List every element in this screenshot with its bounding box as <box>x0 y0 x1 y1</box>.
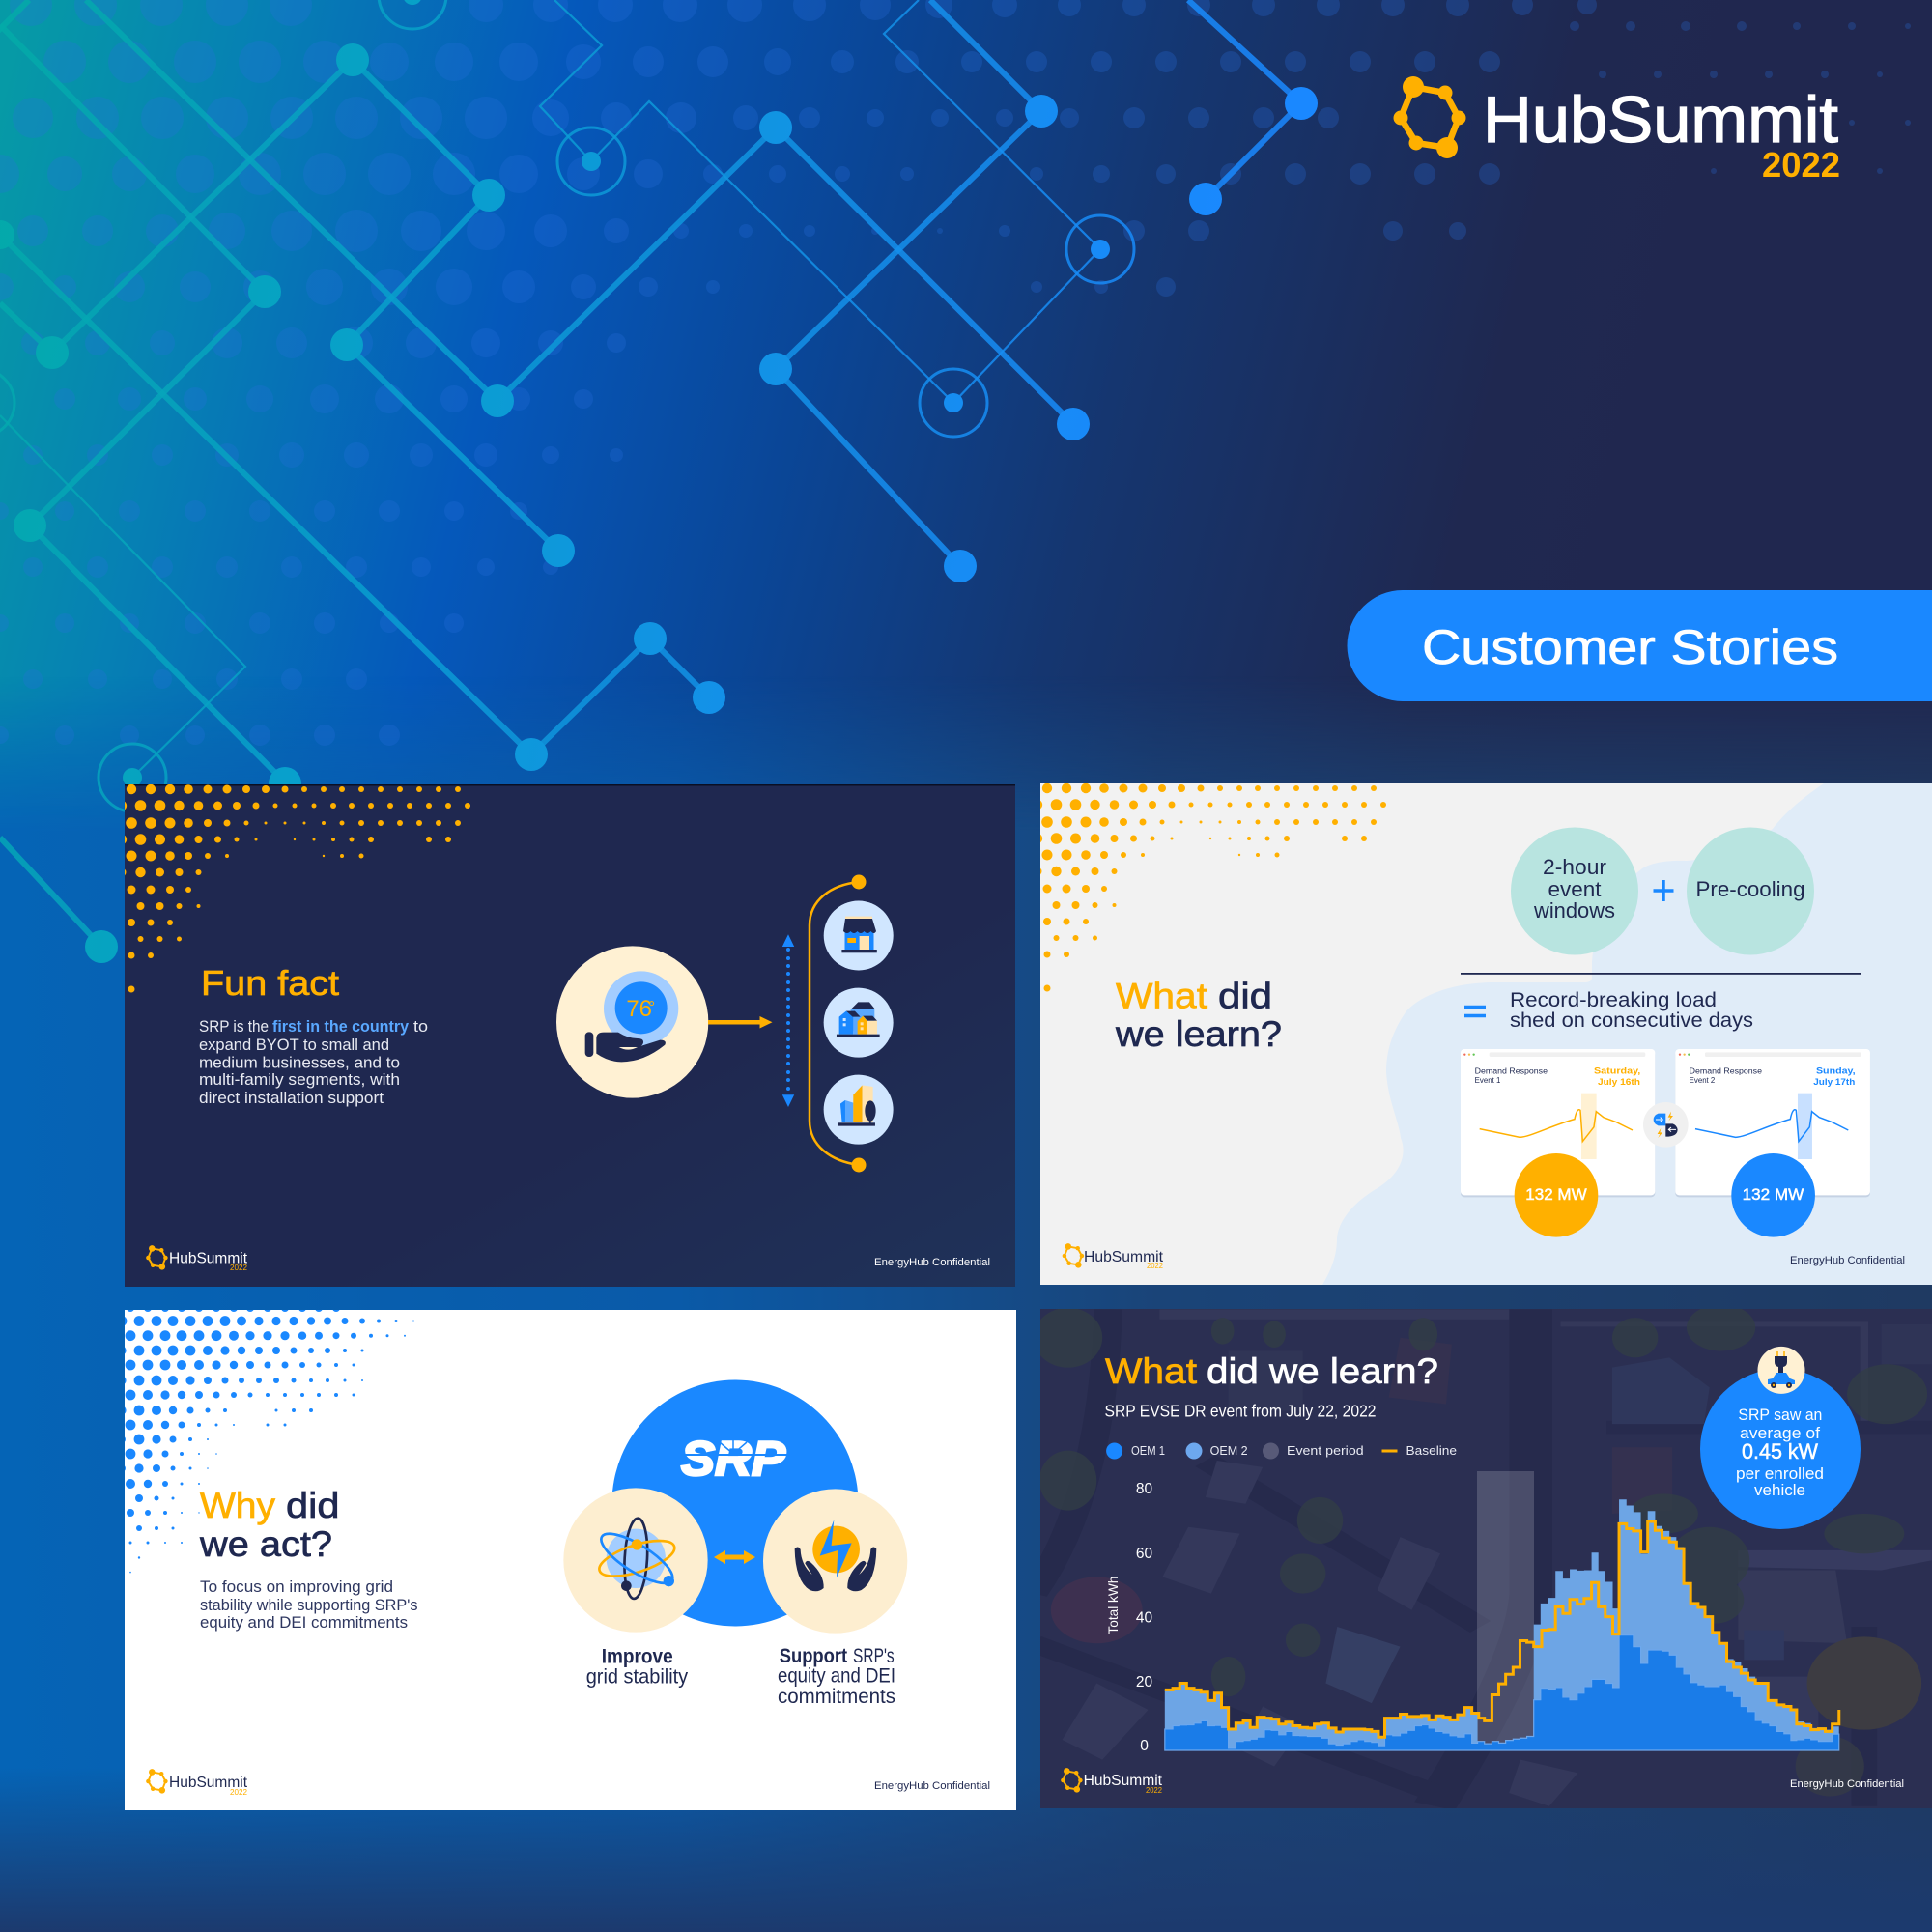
body text: To focus on improving grid <box>200 1578 393 1596</box>
card: Sunday event: July 17th <box>1813 1077 1855 1087</box>
chart subtitle: SRP EVSE DR event from July 22, 2022 <box>1105 1402 1376 1421</box>
result text: shed on consecutive days <box>1510 1009 1753 1032</box>
body text: direct installation support <box>199 1090 384 1107</box>
double arrow <box>714 1550 755 1564</box>
HubSummit 2022 logo <box>1393 76 1840 185</box>
footer logo: HubSummit <box>1084 1249 1164 1265</box>
card: Sunday event: Event 2 <box>1690 1076 1716 1085</box>
heading: Why did we act <box>199 1486 340 1564</box>
card: Sunday event: Demand Response <box>1690 1067 1763 1076</box>
callout: 0.45 kW per vehicle: vehicle <box>1754 1482 1805 1499</box>
icon: small business <box>824 900 894 970</box>
legend: OEM 2 <box>1210 1443 1248 1458</box>
card: Sunday event: 132 MW <box>1743 1185 1804 1204</box>
footer logo: 2022 <box>230 1788 248 1797</box>
footer logo: HubSummit <box>169 1775 248 1791</box>
callout: 0.45 kW per vehicle: 0.45 kW <box>1742 1439 1818 1463</box>
y axis labels: 60 <box>1136 1546 1152 1562</box>
footer logo: 2022 <box>230 1264 248 1272</box>
dotted double arrow <box>782 934 794 1107</box>
legend <box>1106 1443 1457 1459</box>
area: OEM 1 <box>1165 1635 1839 1750</box>
bracket connector <box>810 875 866 1173</box>
arrow <box>708 1016 773 1028</box>
legend: Event period <box>1287 1443 1364 1458</box>
legend: OEM 1 <box>1131 1443 1165 1458</box>
stacked step chart <box>1165 1499 1839 1750</box>
heading: Why did we act: Why <box>200 1486 276 1525</box>
halftone dots <box>1033 783 1386 991</box>
card: Saturday event <box>1461 1049 1655 1237</box>
event period band <box>1477 1471 1534 1749</box>
label: support equity: Support <box>780 1645 847 1667</box>
card: Saturday event: Demand Response <box>1475 1067 1548 1076</box>
footer logo <box>146 1769 248 1797</box>
event cards <box>1461 1049 1870 1237</box>
body text: to <box>413 1018 428 1036</box>
footer logo <box>1063 1243 1164 1270</box>
callout: 0.45 kW per vehicle: average of <box>1740 1425 1820 1442</box>
body text: equity and DEI commitments <box>200 1614 408 1632</box>
SRP circle with logo: SRP <box>681 1432 786 1486</box>
panel: EVSE chart on aerial photo <box>1034 1304 1932 1808</box>
footer logo: HubSummit <box>169 1250 248 1267</box>
panel: what did we learn, load shed <box>1033 783 1932 1285</box>
halftone dots <box>117 784 470 993</box>
footer note: EnergyHub Confidential <box>874 1780 990 1792</box>
SRP circle with logo <box>612 1379 858 1627</box>
footer logo: 2022 <box>1147 1262 1164 1270</box>
logo wordmark: HubSummit <box>1483 83 1838 156</box>
bubble: 2-hour event windows: windows <box>1533 898 1615 923</box>
footer logo <box>146 1245 248 1272</box>
heading: What did we learn: we learn? <box>1115 1014 1282 1054</box>
icon: thermostat in hand <box>556 946 708 1098</box>
body text: SRP is the <box>199 1018 269 1036</box>
heading: What did we learn: What <box>1105 1351 1198 1391</box>
bubble: 2-hour event windows <box>1511 827 1638 954</box>
icon: EV plug car <box>1758 1347 1804 1394</box>
icon: hands holding energy <box>763 1489 907 1634</box>
heading: What did we learn <box>1105 1351 1438 1391</box>
y axis labels: Total kWh <box>1105 1577 1121 1634</box>
y axis labels: 40 <box>1136 1609 1152 1627</box>
icon: energy exchange <box>1643 1102 1689 1148</box>
card: Sunday event: Sunday, <box>1816 1066 1856 1076</box>
aerial neighbourhood backdrop <box>1034 1304 1932 1806</box>
y axis labels: 20 <box>1136 1674 1152 1690</box>
line: baseline <box>1165 1521 1839 1737</box>
background dot grid <box>0 0 1911 746</box>
bubble: 2-hour event windows: 2-hour <box>1543 855 1606 879</box>
Customer Stories banner: Customer Stories <box>1422 620 1838 674</box>
icon: atom grid stability <box>563 1488 708 1633</box>
footer logo: 2022 <box>1146 1786 1163 1795</box>
bubble: pre-cooling <box>1687 827 1814 954</box>
panel: why did we act <box>117 1304 1016 1810</box>
plus sign <box>1654 880 1673 901</box>
legend: Baseline <box>1406 1443 1457 1458</box>
callout: 0.45 kW per vehicle <box>1700 1369 1861 1529</box>
icon: commercial buildings <box>824 1075 894 1145</box>
footer logo <box>1061 1768 1163 1795</box>
label: support equity: SRP's <box>853 1645 895 1667</box>
y axis labels: 0 <box>1140 1738 1149 1754</box>
heading: Fun fact: Fun fact <box>201 963 339 1003</box>
heading: What did we learn: What <box>1116 976 1208 1016</box>
logo year: 2022 <box>1762 145 1840 185</box>
label: improve grid stability: grid stability <box>586 1666 689 1689</box>
heading: What did we learn: did we learn? <box>1207 1351 1438 1391</box>
equals sign <box>1464 1007 1486 1016</box>
circuit network lines and nodes <box>0 0 1318 963</box>
bubble: pre-cooling: Pre-cooling <box>1696 877 1804 901</box>
result text: Record-breaking load <box>1510 989 1717 1011</box>
body text: multi-family segments, with <box>199 1071 400 1089</box>
panel: fun fact <box>117 784 1015 1287</box>
card: Sunday event <box>1675 1049 1870 1237</box>
label: support equity: commitments <box>778 1686 895 1708</box>
result text <box>1510 989 1753 1032</box>
card: Saturday event: Saturday, <box>1594 1066 1640 1076</box>
body text <box>199 1018 428 1107</box>
callout: 0.45 kW per vehicle: per enrolled <box>1736 1465 1824 1483</box>
body text: first in the country <box>272 1018 410 1036</box>
y axis labels <box>1105 1481 1152 1754</box>
heading: What did we learn <box>1115 981 1281 1047</box>
y axis labels: 80 <box>1136 1481 1152 1497</box>
Customer Stories banner <box>1347 590 1932 701</box>
area: OEM 2 <box>1165 1499 1839 1749</box>
footer note: EnergyHub Confidential <box>1790 1255 1905 1266</box>
label: improve grid stability <box>586 1646 689 1689</box>
body text <box>200 1578 417 1632</box>
label: support equity <box>778 1645 895 1708</box>
body text: expand BYOT to small and <box>199 1037 389 1054</box>
body text: stability while supporting SRP's <box>200 1597 417 1614</box>
label: improve grid stability: Improve <box>602 1646 673 1668</box>
icon: hexagon network <box>1393 76 1466 158</box>
body text: medium businesses, and to <box>199 1055 400 1072</box>
callout: 0.45 kW per vehicle: SRP saw an <box>1738 1406 1822 1424</box>
card: Saturday event: 132 MW <box>1525 1185 1587 1204</box>
bubble: 2-hour event windows: event <box>1548 877 1602 901</box>
footer note: EnergyHub Confidential <box>874 1257 990 1268</box>
icon: multifamily homes <box>824 988 894 1058</box>
heading: Why did we act: we act? <box>199 1524 332 1564</box>
footer logo: HubSummit <box>1084 1773 1163 1789</box>
label: support equity: equity and DEI <box>778 1665 895 1688</box>
card: Saturday event: Event 1 <box>1475 1076 1501 1085</box>
footer note: EnergyHub Confidential <box>1790 1778 1904 1790</box>
card: Saturday event: July 16th <box>1598 1077 1640 1087</box>
heading: Why did we act: did <box>286 1486 340 1525</box>
icon: thermostat in hand: 76 <box>626 996 652 1022</box>
heading: What did we learn: did <box>1218 976 1272 1016</box>
halftone dots <box>117 1304 414 1573</box>
